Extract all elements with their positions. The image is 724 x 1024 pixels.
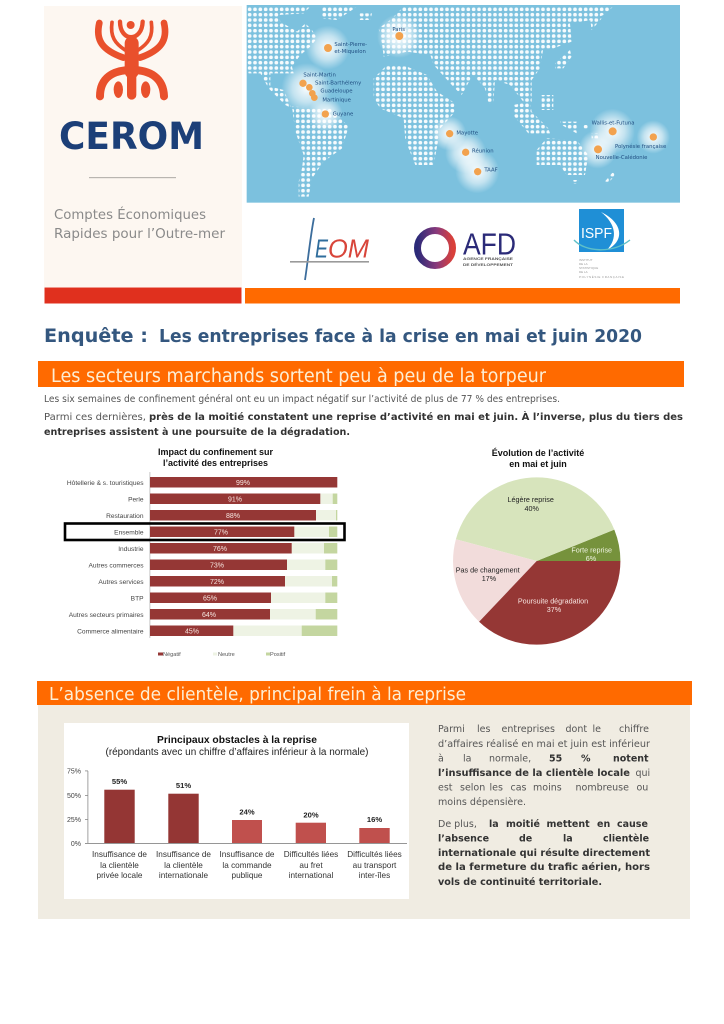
category labels: Autres services [98, 579, 144, 586]
pie labels [456, 495, 612, 614]
intro text: entreprises assistent à une poursuite de la dégradation. [44, 427, 350, 438]
bar values: 99% [236, 480, 250, 487]
logo: AFD: DE DÉVELOPPEMENT [463, 262, 514, 267]
icon: CEROM emblem [98, 21, 165, 98]
bar values: 64% [202, 612, 216, 619]
pie labels: Forte reprise [571, 546, 612, 554]
logo: ISPF: INSTITUT [579, 258, 593, 262]
category labels: au fret [299, 861, 323, 870]
territory labels: Saint-Pierre- [334, 42, 367, 48]
category labels: la clientèle [100, 861, 139, 870]
chart: évolution de l'activité [453, 448, 620, 645]
pie labels: 37% [547, 605, 562, 614]
text block: clientèle internationale: l’absence [438, 834, 489, 844]
territory labels [303, 27, 666, 173]
category labels: Insuffisance de [156, 850, 211, 859]
logo: ISPF: ISPF [581, 225, 612, 242]
pie slices [453, 477, 620, 645]
bar values: 91% [228, 496, 242, 504]
territory labels: Polynésie française [615, 143, 666, 150]
category labels: Hôtellerie & s. touristiques [67, 480, 144, 487]
text block: clientèle locale: la [463, 754, 471, 764]
chart title: l’activité des entreprises [163, 458, 268, 468]
axis labels: 75% [67, 768, 81, 776]
territory labels: Guadeloupe [320, 88, 353, 94]
text block: clientèle locale: à [438, 754, 444, 764]
logo: ISPF: POLYNÉSIE FRANÇAISE [579, 274, 624, 279]
category labels: international [289, 871, 333, 880]
pie labels: 17% [482, 574, 497, 583]
pie title: Évolution de l’activité [492, 448, 584, 458]
neutral and positive segments [233, 494, 337, 636]
axis labels: 50% [67, 793, 81, 800]
logo: AFD [418, 226, 516, 267]
text block: clientèle locale: moins [533, 782, 562, 794]
bar values [112, 777, 382, 824]
bar values: 72% [210, 579, 224, 586]
text block: clientèle locale: les [477, 724, 490, 735]
axis labels: 0% [71, 841, 81, 848]
pie title: en mai et juin [509, 459, 567, 469]
text block: clientèle internationale: cause [617, 819, 648, 830]
title: Enquête : [44, 325, 148, 347]
axis labels: 25% [67, 817, 81, 824]
bar values: 51% [176, 781, 191, 790]
negative bars [150, 477, 337, 636]
territory labels: Saint-Martin [303, 72, 336, 78]
category labels: au transport [353, 861, 397, 870]
text block: clientèle locale: normale, [489, 754, 531, 764]
chart: principaux obstacles [64, 723, 409, 899]
text block: clientèle internationale: De plus, [438, 819, 477, 830]
territory labels: Wallis-et-Futuna [592, 121, 635, 127]
text block: clientèle internationale: de [519, 834, 532, 844]
section banner: absence de clientèle [37, 681, 692, 705]
category labels: Ensemble [114, 530, 144, 536]
text block: clientèle internationale: mettent [546, 819, 590, 830]
text block: clientèle internationale: de la fermeture du trafic aérien, hors [438, 862, 650, 873]
text block: clientèle locale: entreprises [502, 724, 555, 735]
territory labels: et-Miquelon [334, 49, 366, 55]
text block: clientèle internationale: en [597, 819, 610, 830]
intro text: près de la moitié constatent une reprise d’activité en mai et juin. À l’inverse, plus du tiers des [149, 411, 683, 423]
text block: clientèle internationale: la [563, 834, 573, 844]
text block: clientèle locale: selon [460, 782, 485, 794]
text block: clientèle internationale: moitié [506, 819, 540, 830]
tagline: Rapides pour l’Outre-mer [54, 226, 225, 242]
chart title: Principaux obstacles à la reprise [157, 735, 317, 746]
axis labels [67, 768, 81, 848]
category labels: Insuffisance de [92, 850, 147, 859]
pie labels: Poursuite dégradation [518, 596, 588, 606]
bar values: 55% [112, 777, 127, 786]
logo: ISPF [574, 209, 630, 279]
intro text [44, 394, 683, 438]
logo: IEOM: E [315, 234, 328, 264]
territory labels: Paris [392, 27, 405, 33]
text block: clientèle locale: l’insuffisance de la clientèle locale [438, 768, 630, 779]
text block: clientèle locale [438, 724, 650, 808]
category labels: privée locale [97, 871, 143, 880]
text block: clientèle locale: est [438, 782, 453, 794]
category labels: la clientèle [164, 861, 203, 870]
pie labels: Pas de changement [456, 566, 520, 574]
text block: clientèle locale: % [581, 754, 591, 764]
text block: clientèle internationale: vols de continuité territoriale. [438, 877, 602, 888]
bar values: 65% [203, 596, 217, 602]
territory labels: Nouvelle-Calédonie [596, 154, 647, 161]
category labels: Restauration [106, 513, 144, 520]
bar values [185, 480, 250, 636]
bar values: 73% [210, 562, 224, 570]
text block: clientèle internationale: clientèle [603, 834, 649, 844]
category labels: Insuffisance de [220, 850, 275, 859]
tagline [54, 206, 225, 242]
bar values: 77% [214, 530, 228, 536]
category labels [92, 850, 402, 880]
text block: clientèle locale: 55 [549, 754, 562, 764]
intro text: Les six semaines de confinement général ont eu un impact négatif sur l’activité de plus de 77 % des entreprises. [44, 394, 560, 405]
territory labels: Réunion [472, 148, 494, 155]
chart title: Impact du confinement sur [158, 447, 274, 457]
text block: clientèle locale: chiffre [619, 724, 649, 735]
logo: ISPF: DE LA [579, 262, 588, 266]
axes [85, 770, 407, 844]
territory labels: Mayotte [456, 130, 478, 136]
category labels: Autres commerces [89, 562, 144, 570]
category labels: BTP [131, 596, 144, 602]
panel: CEROM identity [44, 6, 242, 287]
text block: clientèle locale: Parmi [438, 724, 465, 735]
category labels: Difficultés liées [347, 850, 402, 859]
pie labels: 6% [586, 554, 597, 563]
text block: clientèle internationale: la [489, 819, 499, 830]
category labels: Commerce alimentaire [77, 628, 144, 636]
logo: ISPF: DE LA [579, 270, 588, 274]
bar values: 76% [213, 546, 227, 553]
section banner: secteurs marchands [38, 361, 684, 387]
bar values: 20% [303, 810, 319, 820]
logo: IEOM: OM [328, 234, 369, 264]
pie title [492, 448, 584, 469]
bar values: 16% [367, 815, 382, 824]
chart title [158, 447, 274, 468]
logo: AFD: AFD [463, 226, 516, 262]
text block: clientèle locale: dont [566, 724, 587, 735]
category labels: Autres secteurs primaires [69, 612, 144, 619]
category labels: Difficultés liées [284, 850, 338, 859]
category labels [67, 480, 144, 636]
territory labels: Guyane [333, 111, 353, 117]
chart: impact du confinement [65, 447, 344, 658]
logo: AFD: AGENCE FRANÇAISE [463, 257, 514, 261]
logo: ISPF: STATISTIQUE [579, 266, 598, 270]
territory labels: Saint-Barthélemy [315, 79, 361, 86]
category labels: internationale [159, 871, 209, 880]
legend: Neutre [218, 652, 235, 658]
text block: clientèle locale: moins dépensière. [438, 797, 526, 808]
text block: clientèle locale: nombreuse [576, 782, 629, 794]
pie labels: Légère reprise [508, 495, 554, 504]
text block: clientèle internationale [438, 819, 650, 888]
category labels: Perle [128, 496, 144, 504]
bar values: 24% [239, 808, 255, 816]
text block: clientèle locale: qui [636, 768, 650, 779]
text block: clientèle internationale: internationale qui résulte directement [438, 848, 650, 859]
bars [104, 790, 390, 843]
bar values: 88% [226, 513, 240, 520]
chart title: (répondants avec un chiffre d’affaires inférieur à la normale) [106, 747, 368, 758]
bar values: 45% [185, 628, 199, 636]
territory labels: TAAF [483, 167, 498, 173]
pie labels: 40% [525, 504, 539, 513]
section banner: absence de clientèle: L’absence de clientèle, principal frein à la reprise [49, 684, 466, 705]
territory labels: Martinique [322, 97, 351, 103]
legend: Négatif [163, 652, 181, 658]
category labels: la commande [222, 861, 272, 870]
legend [158, 652, 286, 658]
category labels: publique [232, 871, 263, 880]
text block: clientèle locale: ou [636, 782, 648, 794]
panel: absence de clientèle [37, 681, 692, 919]
CEROM wordmark: CEROM [59, 115, 204, 158]
chart title [106, 735, 368, 758]
category labels: inter-îles [359, 871, 390, 880]
text block: clientèle locale: notent [613, 754, 649, 764]
intro text: Parmi ces dernières, [44, 412, 146, 423]
text block: clientèle locale: le [592, 724, 601, 735]
panel: world map of overseas territories [247, 5, 680, 203]
logo: IEOM [290, 218, 369, 280]
legend: Positif [270, 652, 286, 658]
text block: clientèle locale: d’affaires réalisé en mai et juin est inférieur [438, 739, 650, 750]
territory markers [299, 32, 657, 175]
title: Les entreprises face à la crise en mai et juin 2020 [159, 326, 642, 347]
section banner: secteurs marchands: Les secteurs marchands sortent peu à peu de la torpeur [51, 366, 546, 387]
tagline: Comptes Économiques [54, 206, 206, 223]
highlight: Ensemble row [65, 524, 344, 540]
header colour bars [44, 288, 680, 304]
category labels: Industrie [118, 546, 144, 553]
text block: clientèle locale: cas [510, 782, 527, 794]
text block: clientèle locale: les [490, 782, 503, 794]
